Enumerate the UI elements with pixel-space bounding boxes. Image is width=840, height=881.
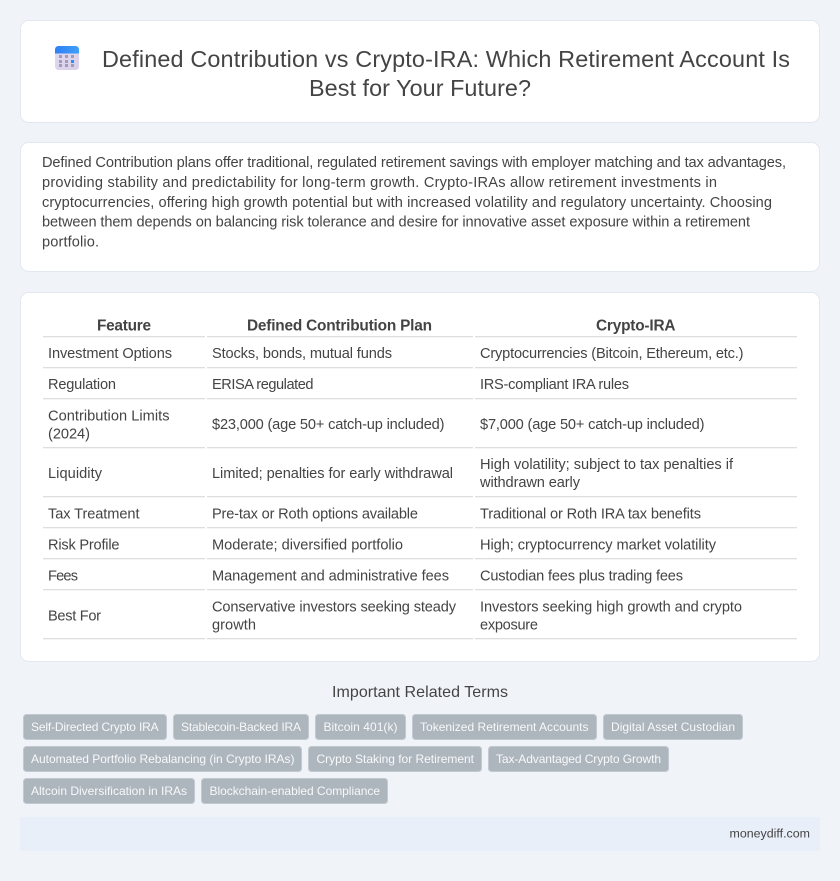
heading: related terms: Important Related Terms [332, 684, 508, 701]
row: best for [48, 600, 742, 634]
row: regulation: IRS-compliant IRA rules [480, 377, 629, 393]
row: contribution limits: $7,000 (age 50+ catch-up included) [480, 417, 704, 433]
summary text: providing stability and predictability for long-term growth. Crypto-IRAs allow retirement investments in [42, 175, 717, 191]
title: Defined Contribution vs Crypto-IRA: Which Retirement Account Is [102, 46, 790, 72]
tag group: related terms: Tokenized Retirement Accounts [420, 720, 588, 734]
row: fees [48, 568, 683, 584]
row: liquidity: Limited; penalties for early withdrawal [212, 466, 453, 482]
tag group: related terms: Automated Portfolio Rebalancing (in Crypto IRAs) [31, 752, 294, 766]
tag group: related terms: Self-Directed Crypto IRA [31, 720, 159, 734]
tag group: related terms: Blockchain-enabled Compliance [210, 784, 380, 798]
row: contribution limits: (2024) [48, 426, 90, 442]
tag group: related terms: Tax-Advantaged Crypto Growth [496, 752, 661, 766]
row: tax treatment: Tax Treatment [48, 506, 140, 522]
row: fees: Custodian fees plus trading fees [480, 568, 683, 584]
summary text [42, 155, 786, 250]
table header row: Feature [97, 318, 151, 335]
row: risk profile: Moderate; diversified portfolio [212, 538, 403, 554]
row: investment options [48, 346, 744, 362]
row: liquidity [48, 457, 734, 491]
table header row: Crypto-IRA [596, 318, 676, 335]
summary text: between them depends on balancing risk tolerance and desire for innovative asset exposure within a retirement [42, 215, 750, 231]
tag group: related terms: Bitcoin 401(k) [324, 720, 398, 734]
row: investment options: Stocks, bonds, mutual funds [212, 346, 392, 362]
title [102, 46, 790, 101]
row: investment options: Investment Options [48, 346, 172, 362]
summary text: Defined Contribution plans offer traditional, regulated retirement savings with employer matching and tax advantages, [42, 155, 786, 171]
row: investment options: Cryptocurrencies (Bitcoin, Ethereum, etc.) [480, 346, 744, 362]
panel: summary paragraph [20, 142, 820, 272]
footer text: moneydiff.com [730, 827, 810, 841]
header panel [20, 20, 820, 122]
row: tax treatment [48, 506, 701, 522]
row: regulation: ERISA regulated [212, 377, 314, 393]
row: risk profile: High; cryptocurrency market volatility [480, 538, 717, 554]
footer bar [20, 817, 820, 851]
row: contribution limits: Contribution Limits [48, 408, 170, 424]
row: risk profile [48, 538, 717, 554]
summary text: cryptocurrencies, offering high growth potential but with increased volatility and regulatory uncertainty. Choosing [42, 195, 772, 211]
table header row: Defined Contribution Plan [247, 318, 432, 335]
row: best for: Best For [48, 608, 101, 624]
row: best for: Investors seeking high growth and crypto [480, 600, 742, 616]
icon: calendar [55, 46, 79, 70]
table header row [97, 318, 676, 335]
tag group: related terms: Stablecoin-Backed IRA [181, 720, 301, 734]
tag group: related terms: Altcoin Diversification in IRAs [31, 784, 187, 798]
tag group: related terms: Crypto Staking for Retirement [316, 752, 475, 766]
tag group: related terms: Digital Asset Custodian [611, 720, 735, 734]
tag group: related terms [24, 714, 742, 804]
row: tax treatment: Traditional or Roth IRA tax benefits [480, 506, 701, 522]
row: contribution limits [48, 408, 704, 442]
row: tax treatment: Pre-tax or Roth options available [212, 506, 418, 522]
title: Best for Your Future? [309, 75, 531, 101]
row: regulation [48, 377, 629, 393]
row: risk profile: Risk Profile [48, 538, 120, 554]
row: liquidity: High volatility; subject to tax penalties if [480, 457, 734, 473]
row: best for: Conservative investors seeking steady [212, 600, 457, 616]
row: fees: Management and administrative fees [212, 568, 449, 584]
summary text: portfolio. [42, 234, 99, 250]
row: liquidity: Liquidity [48, 466, 103, 482]
panel: comparison table [20, 292, 820, 662]
row: fees: Fees [48, 568, 78, 584]
row: best for: growth [212, 618, 256, 634]
row: liquidity: withdrawn early [479, 475, 581, 491]
row: best for: exposure [480, 618, 538, 634]
row: regulation: Regulation [48, 377, 116, 393]
row: contribution limits: $23,000 (age 50+ catch-up included) [212, 417, 444, 433]
